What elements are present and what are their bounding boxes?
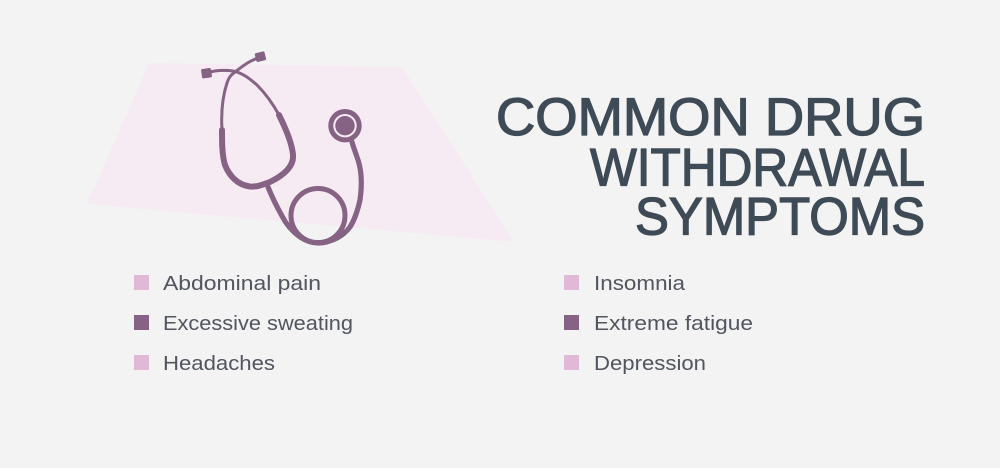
item: extreme fatigue: Extreme fatigue xyxy=(594,312,753,335)
panel: pink background shape xyxy=(87,63,514,242)
title xyxy=(496,88,925,246)
item: insomnia: Insomnia xyxy=(594,272,686,295)
list: left symptoms xyxy=(134,272,353,375)
title: WITHDRAWAL xyxy=(590,138,925,198)
icon: stethoscope xyxy=(201,51,362,243)
bullet: insomnia xyxy=(564,275,579,290)
title: COMMON DRUG xyxy=(496,88,925,147)
item: depression: Depression xyxy=(594,352,706,375)
bullet: headaches xyxy=(134,355,149,370)
title: SYMPTOMS xyxy=(635,188,925,246)
list: right symptoms xyxy=(564,272,753,375)
bullet: abdominal pain xyxy=(134,275,149,290)
bullet: excessive sweating xyxy=(134,315,149,330)
item: excessive sweating: Excessive sweating xyxy=(163,312,353,335)
bullet: depression xyxy=(564,355,579,370)
bullet: extreme fatigue xyxy=(564,315,579,330)
item: headaches: Headaches xyxy=(163,352,275,375)
item: abdominal pain: Abdominal pain xyxy=(163,272,321,295)
